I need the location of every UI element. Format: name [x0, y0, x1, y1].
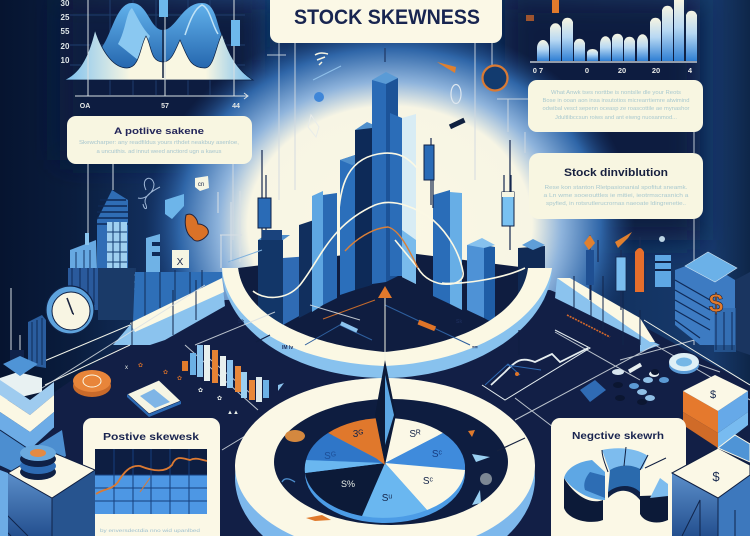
floor line grid [42, 285, 750, 450]
building: striped block [675, 260, 735, 345]
pie labels: Sᴿ [409, 429, 421, 440]
icon: sketch shape [308, 115, 319, 137]
icon: floor coin [669, 353, 699, 374]
panel: top-right histogram [526, 0, 697, 75]
axis line and ticks [75, 0, 248, 99]
axis labels left: 25 [61, 13, 70, 22]
building: tower [97, 190, 128, 300]
orange diamond marker [584, 235, 595, 250]
orange arrow marker [615, 232, 632, 248]
panel: A positive skew text [67, 116, 252, 164]
pie labels: 3ᴳ [353, 429, 363, 440]
small floor glyphs: ✿ [163, 369, 168, 376]
heading: Postive skewesk [103, 431, 199, 443]
axis labels left [61, 0, 70, 65]
building: slanted dark bars [68, 268, 98, 310]
pie depth [305, 423, 465, 523]
left city cluster [68, 176, 282, 322]
central glow floor stage [238, 250, 528, 355]
ring chart [564, 447, 668, 522]
small floor glyphs: ✿ [217, 395, 222, 402]
dollar stack: $ [710, 389, 716, 401]
left city cluster: X [177, 257, 184, 268]
small sign [172, 250, 189, 268]
panel heading: Stock dinviblution [564, 167, 668, 179]
axis labels: 20 [618, 66, 626, 75]
heading: Negctive skewrh [572, 430, 664, 442]
icon: wifi doodle [315, 53, 328, 65]
isometric block bottom-right [672, 435, 750, 536]
building: stepped tower bottom-left [0, 350, 66, 480]
chart: central 3D bars [258, 72, 545, 336]
candlesticks in glow [258, 138, 514, 250]
panel body: Jdultlibccsun roiws and ant eiwng nuosanmod... [555, 115, 677, 121]
axis labels left: 20 [61, 42, 70, 51]
light ledge right [555, 278, 660, 352]
small floor glyphs: ✿ [177, 375, 182, 382]
stage floor details [305, 300, 470, 345]
left wing bars [258, 240, 283, 336]
axis labels left: 55 [61, 27, 70, 36]
panel body [542, 90, 690, 121]
compass needle [372, 290, 396, 465]
icon: clock [46, 286, 94, 334]
panel: negative skew chart card [551, 418, 686, 536]
small floor glyphs: ✿ [198, 387, 203, 394]
building: letter block [146, 234, 160, 300]
icon: orange chair [185, 214, 208, 241]
bars [537, 0, 697, 61]
wall front band [222, 270, 552, 378]
axis labels: OA [80, 103, 90, 110]
panel body: What Anwk tses norttbe is nontslle dle your Reots [551, 90, 682, 96]
panel: right text note [528, 80, 703, 132]
right city [584, 232, 750, 385]
axis labels [80, 103, 240, 110]
mini line chart [95, 449, 207, 514]
small floor glyphs [125, 362, 239, 416]
left city cluster: cn [198, 182, 204, 188]
icon: light shield [165, 194, 184, 219]
curves over the bars [253, 153, 525, 297]
axis labels [533, 66, 693, 75]
small floor glyphs: ▲▲ [227, 410, 239, 416]
pie labels: Sᶜ [432, 449, 443, 460]
left side candle [262, 230, 282, 240]
pie labels: S% [341, 479, 355, 489]
chart grid [70, 0, 245, 95]
panel body: odwibal vesct sepenn oceasp ze roascottile ae mynashor [542, 106, 690, 112]
icon: orange ring [482, 66, 508, 90]
distribution front curve [64, 30, 253, 80]
wall small tick labels: Sk [238, 319, 244, 325]
icon: tablet [127, 380, 181, 417]
dollar mark: $ [712, 469, 720, 484]
caption: by enversdectdia nno wid upanlbed [100, 528, 201, 533]
pie slices [305, 418, 465, 518]
pie labels: Sᵘ [382, 493, 392, 504]
curved wall around the stage [222, 268, 552, 378]
thin candle wicks [218, 191, 242, 268]
floor right mini chart [482, 315, 610, 402]
panel body: Bose in ooan aon insa insutotios micrearrtiemre atwimind [542, 98, 690, 104]
panel: positive skew chart card [83, 418, 220, 536]
floor right dots [612, 363, 669, 405]
wall small tick labels: == [472, 345, 478, 351]
top candles [159, 0, 168, 17]
marker dot [659, 236, 665, 242]
heading: STOCK SKEWNESS [294, 6, 480, 29]
dollar stack [683, 375, 748, 448]
dial dark well [274, 399, 508, 525]
title panel [270, 0, 502, 43]
axis labels: 20 [652, 66, 660, 75]
wall small tick labels: Sk [456, 319, 462, 325]
icon: blue slash [313, 66, 341, 80]
panel body [79, 140, 239, 155]
axis labels: 0 [585, 66, 589, 75]
connector lines [267, 43, 694, 345]
right wing bars [390, 113, 402, 276]
icon: orange arrow [437, 62, 456, 73]
panel: stock distribution [529, 153, 703, 219]
mini chart: left floor bars [182, 345, 284, 402]
icon: tiny capsule [449, 118, 466, 129]
light ledge left [113, 280, 225, 345]
icon: speech tag [195, 176, 209, 191]
panel body: spyfied, in rotsrutlerucrornas naeoate ldingrenetie.. [546, 201, 686, 207]
icon: squiggle key [138, 178, 160, 209]
icon: zero glyph [451, 84, 461, 104]
wall small tick labels: lM lv [282, 345, 293, 351]
panel body: a Ln wme sooeouttles ie mitiei, ieotrmscrasnich a [544, 193, 689, 199]
axis [530, 61, 697, 63]
wall cream top [222, 268, 552, 366]
curve: upper white [338, 153, 417, 232]
pie labels: Sᴳ [324, 451, 336, 462]
wall small tick labels [238, 319, 478, 351]
small floor glyphs: x [125, 365, 128, 371]
doodle icons top center [308, 48, 508, 137]
panel heading: A potlive sakene [114, 126, 204, 136]
panel: top-left distribution chart [61, 0, 253, 110]
curve: main white [253, 203, 463, 297]
icon: orange coin [73, 370, 111, 397]
panel body [544, 185, 689, 207]
axis labels: 57 [161, 103, 169, 110]
axis labels: 44 [232, 103, 240, 110]
compass pie dial [235, 286, 535, 536]
building: striped dark [100, 268, 136, 318]
building: low left block [70, 240, 98, 320]
axis labels: 0 7 [533, 66, 543, 75]
axis labels: 4 [688, 66, 693, 75]
pie labels: Sᶜ [423, 476, 434, 487]
isometric block bottom-left [0, 445, 95, 536]
dial cream ring [235, 378, 535, 536]
small floor glyphs: ✿ [138, 362, 143, 369]
orange candle [552, 0, 559, 13]
icon: blue dot [314, 92, 324, 102]
pie labels [324, 429, 443, 504]
curve: orange [345, 227, 418, 268]
candle row [590, 235, 680, 310]
orange dollar sign: $ [709, 288, 724, 318]
needle marker arrow [378, 286, 392, 298]
panel body: a uncuithis. ad innut weed anctiord ugn a kaeus [96, 149, 222, 155]
icon: tablet [718, 435, 750, 462]
icon: coin stack [20, 445, 56, 480]
dial markers [285, 430, 305, 442]
panel body: Skewcharper: any readfildus yours rthdet neakbuy asenloe, [79, 140, 239, 146]
floor [0, 290, 750, 536]
axis labels left: 10 [61, 56, 70, 65]
dial blue outer rim [235, 378, 535, 536]
central tall bar [372, 80, 386, 284]
building: small striped left [28, 315, 46, 368]
panel body: Rese kon stanton Rletpasionanial spofitut sneamk. [544, 185, 688, 191]
distribution back curves [100, 3, 225, 75]
